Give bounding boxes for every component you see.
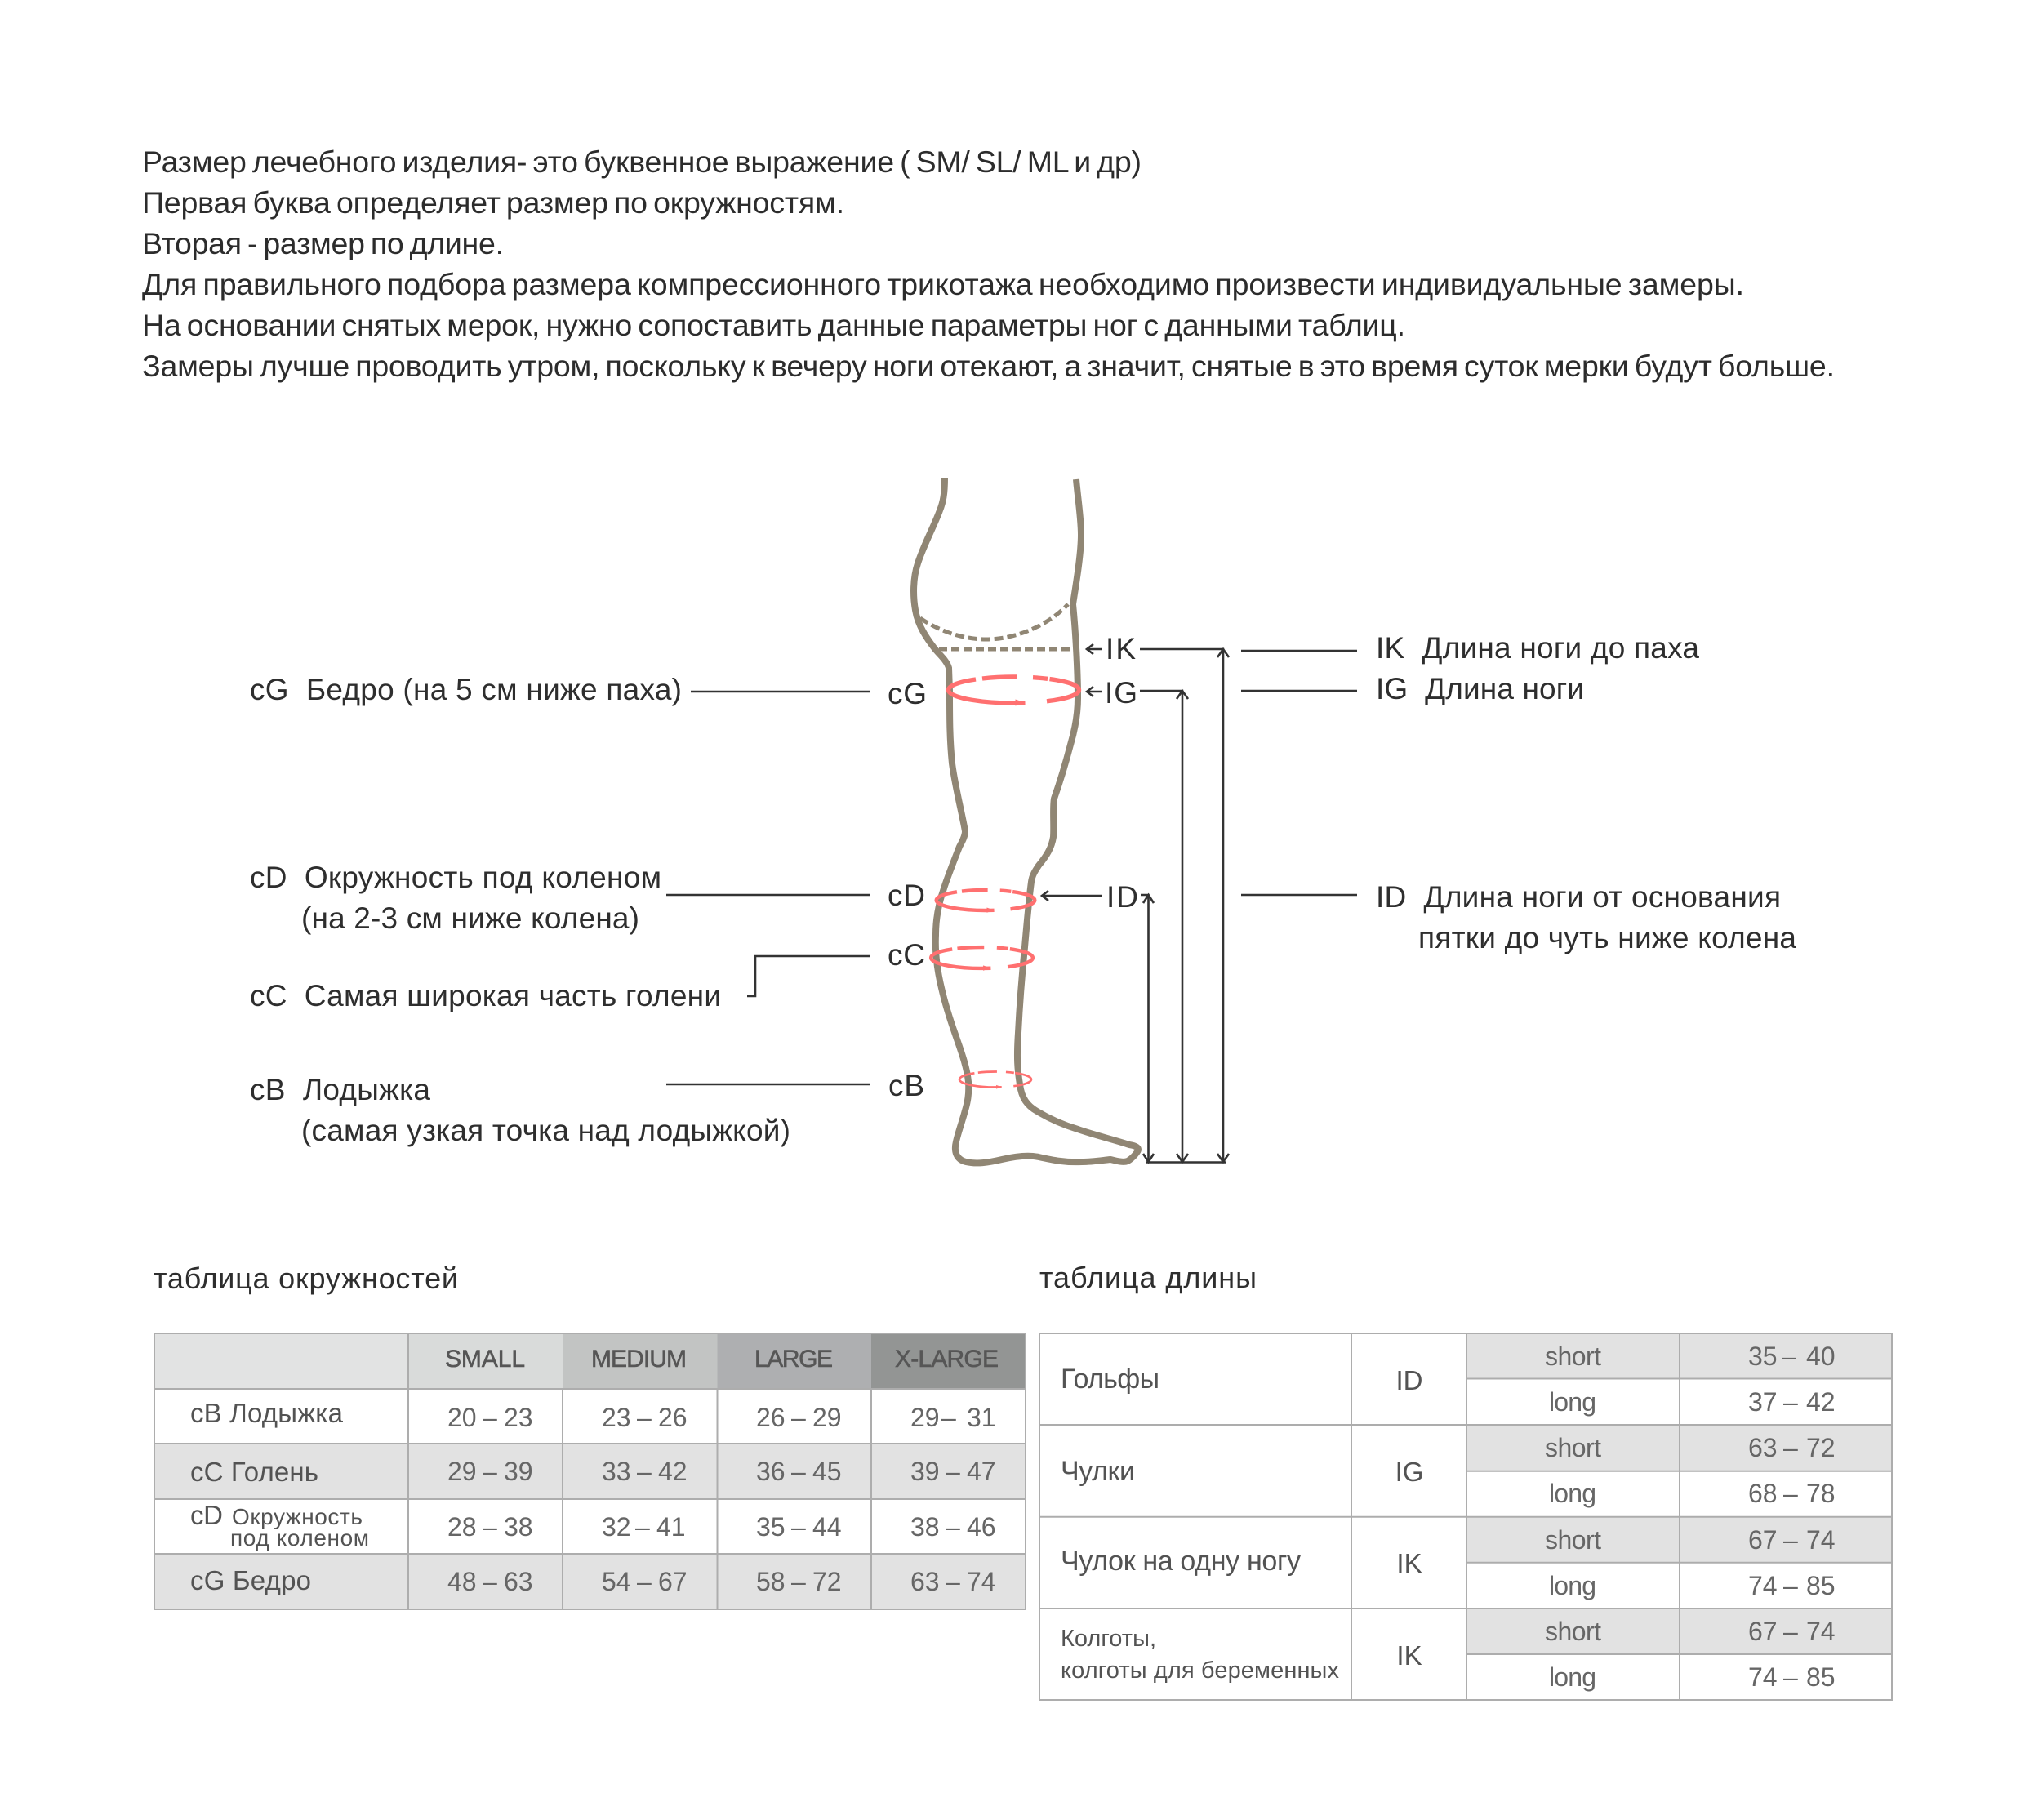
intro text block: На основании снятых мерок, нужно сопоставить данные параметры ног с данными таблиц. [142, 308, 1405, 342]
diagram point labels: IG [1105, 676, 1137, 710]
row labels: cD [190, 1500, 223, 1530]
length values: 74 [1806, 1617, 1836, 1646]
diagram point labels: cC [888, 938, 925, 972]
measure codes: ID [1396, 1365, 1422, 1395]
length values: – [1783, 1387, 1798, 1417]
length values: 40 [1806, 1342, 1836, 1371]
heading: circumference table: таблица окружностей [154, 1262, 458, 1295]
intro text block: Вторая - размер по длине. [142, 226, 504, 260]
short and long labels: long [1549, 1571, 1596, 1600]
product names: Гольфы [1061, 1364, 1159, 1395]
heading: length table: таблица длины [1039, 1261, 1257, 1294]
values: – [637, 1403, 652, 1432]
right labels [1376, 631, 1796, 954]
values: 54 [602, 1567, 631, 1596]
left labels: cD Окружность под коленом [250, 861, 661, 894]
row labels [190, 1398, 369, 1595]
values: 47 [967, 1457, 996, 1486]
length values: 37 [1748, 1387, 1778, 1417]
leg outline [914, 478, 1138, 1163]
values: 74 [967, 1567, 996, 1596]
right labels: IG Длина ноги [1376, 672, 1584, 705]
left labels [250, 673, 790, 1147]
values: – [791, 1567, 806, 1596]
values: 35 [756, 1512, 786, 1542]
values: – [791, 1403, 806, 1432]
values: – [637, 1567, 652, 1596]
intro text block: Первая буква определяет размер по окружностям. [142, 185, 844, 220]
values: 63 [910, 1567, 940, 1596]
header row: X-LARGE [895, 1346, 999, 1373]
values: – [946, 1567, 960, 1596]
left labels: cC Самая широкая часть голени [250, 979, 721, 1012]
values: 42 [658, 1457, 688, 1486]
length values [1748, 1342, 1836, 1692]
values: – [791, 1457, 806, 1486]
short and long labels: long [1549, 1662, 1596, 1692]
length values: 67 [1748, 1525, 1778, 1555]
right labels: пятки до чуть ниже колена [1418, 921, 1796, 954]
row labels: cG Бедро [190, 1565, 311, 1595]
values: 44 [812, 1512, 842, 1542]
product names: Чулок на одну ногу [1061, 1546, 1301, 1577]
values: – [791, 1512, 806, 1542]
length values: – [1783, 1525, 1798, 1555]
values: – [941, 1403, 956, 1432]
length values: – [1783, 1617, 1798, 1646]
values: 31 [967, 1403, 996, 1432]
dashed top curve [920, 604, 1068, 639]
values: 39 [910, 1457, 940, 1486]
values: 46 [967, 1512, 996, 1542]
values: – [946, 1457, 960, 1486]
ring: cB [959, 1071, 1031, 1089]
grid [154, 1333, 1026, 1609]
values: 48 [447, 1567, 477, 1596]
values: – [637, 1457, 652, 1486]
ring: cD [937, 890, 1035, 913]
values: – [483, 1567, 497, 1596]
row labels: cB Лодыжка [190, 1398, 344, 1428]
length values: 74 [1806, 1525, 1836, 1555]
striped rows [154, 1444, 1026, 1609]
values: 26 [756, 1403, 786, 1432]
short and long labels: long [1549, 1387, 1596, 1417]
short and long labels: short [1545, 1617, 1601, 1646]
short and long labels: long [1549, 1479, 1596, 1508]
values: 38 [910, 1512, 940, 1542]
intro text block [142, 145, 1835, 383]
header row: MEDIUM [591, 1346, 687, 1373]
right labels: ID Длина ноги от основания [1376, 880, 1781, 914]
header row [154, 1333, 1026, 1389]
ring: cC [931, 947, 1033, 971]
values: 23 [602, 1403, 631, 1432]
length values: 72 [1806, 1433, 1836, 1462]
dashed IK line [939, 647, 1071, 652]
length values: – [1782, 1342, 1796, 1371]
length values: 68 [1748, 1479, 1778, 1508]
left labels: (самая узкая точка над лодыжкой) [301, 1114, 790, 1147]
values: – [483, 1457, 497, 1486]
length table [1039, 1333, 1892, 1700]
values: 20 [447, 1403, 477, 1432]
right labels: IK Длина ноги до паха [1376, 631, 1699, 665]
row labels: cC Голень [190, 1457, 318, 1487]
intro text block: Замеры лучше проводить утром, поскольку к вечеру ноги отекают, а значит, снятые в это время суток мерки будут больше. [142, 349, 1835, 383]
left labels: cG Бедро (на 5 см ниже паха) [250, 673, 682, 706]
values: 29 [910, 1403, 940, 1432]
values: 33 [602, 1457, 631, 1486]
values: – [635, 1512, 650, 1542]
values: 28 [447, 1512, 477, 1542]
length values: – [1783, 1433, 1798, 1462]
row labels: Окружность [232, 1504, 363, 1529]
diagram point labels: cG [888, 677, 927, 710]
values [447, 1403, 996, 1596]
measure codes: IK [1396, 1640, 1422, 1671]
product names: Колготы, [1061, 1626, 1156, 1652]
product names: колготы для беременных [1061, 1658, 1339, 1684]
product names: Чулки [1061, 1456, 1135, 1487]
header row: LARGE [754, 1346, 833, 1373]
intro text block: Для правильного подбора размера компрессионного трикотажа необходимо произвести индивидуальные замеры. [142, 267, 1744, 301]
length values: – [1783, 1662, 1798, 1692]
measure codes: IG [1395, 1457, 1423, 1487]
leg diagram [914, 478, 1138, 1163]
intro text block: Размер лечебного изделия- это буквенное выражение ( SM/ SL/ ML и др) [142, 145, 1142, 179]
row labels: под коленом [230, 1525, 369, 1551]
values: 58 [756, 1567, 786, 1596]
measure codes: IK [1396, 1548, 1422, 1578]
length values: 74 [1748, 1662, 1778, 1692]
values: 29 [812, 1403, 842, 1432]
values: 72 [812, 1567, 842, 1596]
values: – [483, 1403, 497, 1432]
length values: – [1783, 1571, 1798, 1600]
values: – [946, 1512, 960, 1542]
length values: 85 [1806, 1662, 1836, 1692]
diagram point labels: IK [1106, 632, 1136, 665]
values: 41 [656, 1512, 686, 1542]
values: 26 [658, 1403, 688, 1432]
length values: 35 [1748, 1342, 1778, 1371]
values: – [483, 1512, 497, 1542]
length values: 42 [1806, 1387, 1836, 1417]
values: 45 [812, 1457, 842, 1486]
arrows and leader lines [666, 644, 1357, 1163]
grid [1039, 1333, 1892, 1700]
short and long labels: short [1545, 1433, 1601, 1462]
left labels: (на 2-3 см ниже колена) [301, 901, 639, 935]
length values: 63 [1748, 1433, 1778, 1462]
measure codes [1395, 1365, 1423, 1671]
values: 32 [602, 1512, 631, 1542]
short and long labels [1545, 1342, 1601, 1692]
diagram point labels: ID [1106, 880, 1138, 914]
product names [1061, 1364, 1339, 1684]
length values: 78 [1806, 1479, 1836, 1508]
values: 63 [504, 1567, 533, 1596]
length values: 67 [1748, 1617, 1778, 1646]
short and long labels: short [1545, 1342, 1601, 1371]
values: 23 [504, 1403, 533, 1432]
values: 36 [756, 1457, 786, 1486]
values: 29 [447, 1457, 477, 1486]
striped rows [1466, 1333, 1892, 1654]
diagram point labels: cB [888, 1069, 924, 1102]
short and long labels: short [1545, 1525, 1601, 1555]
left labels: cB Лодыжка [250, 1073, 430, 1106]
header row: SMALL [445, 1346, 525, 1373]
diagram point labels: cD [888, 879, 925, 912]
circumference table [154, 1333, 1026, 1609]
values: 38 [504, 1512, 533, 1542]
length values: 85 [1806, 1571, 1836, 1600]
values: 67 [658, 1567, 688, 1596]
length values: – [1783, 1479, 1798, 1508]
length values: 74 [1748, 1571, 1778, 1600]
diagram point labels [888, 632, 1138, 1102]
ring: cG [949, 677, 1079, 705]
values: 39 [504, 1457, 533, 1486]
